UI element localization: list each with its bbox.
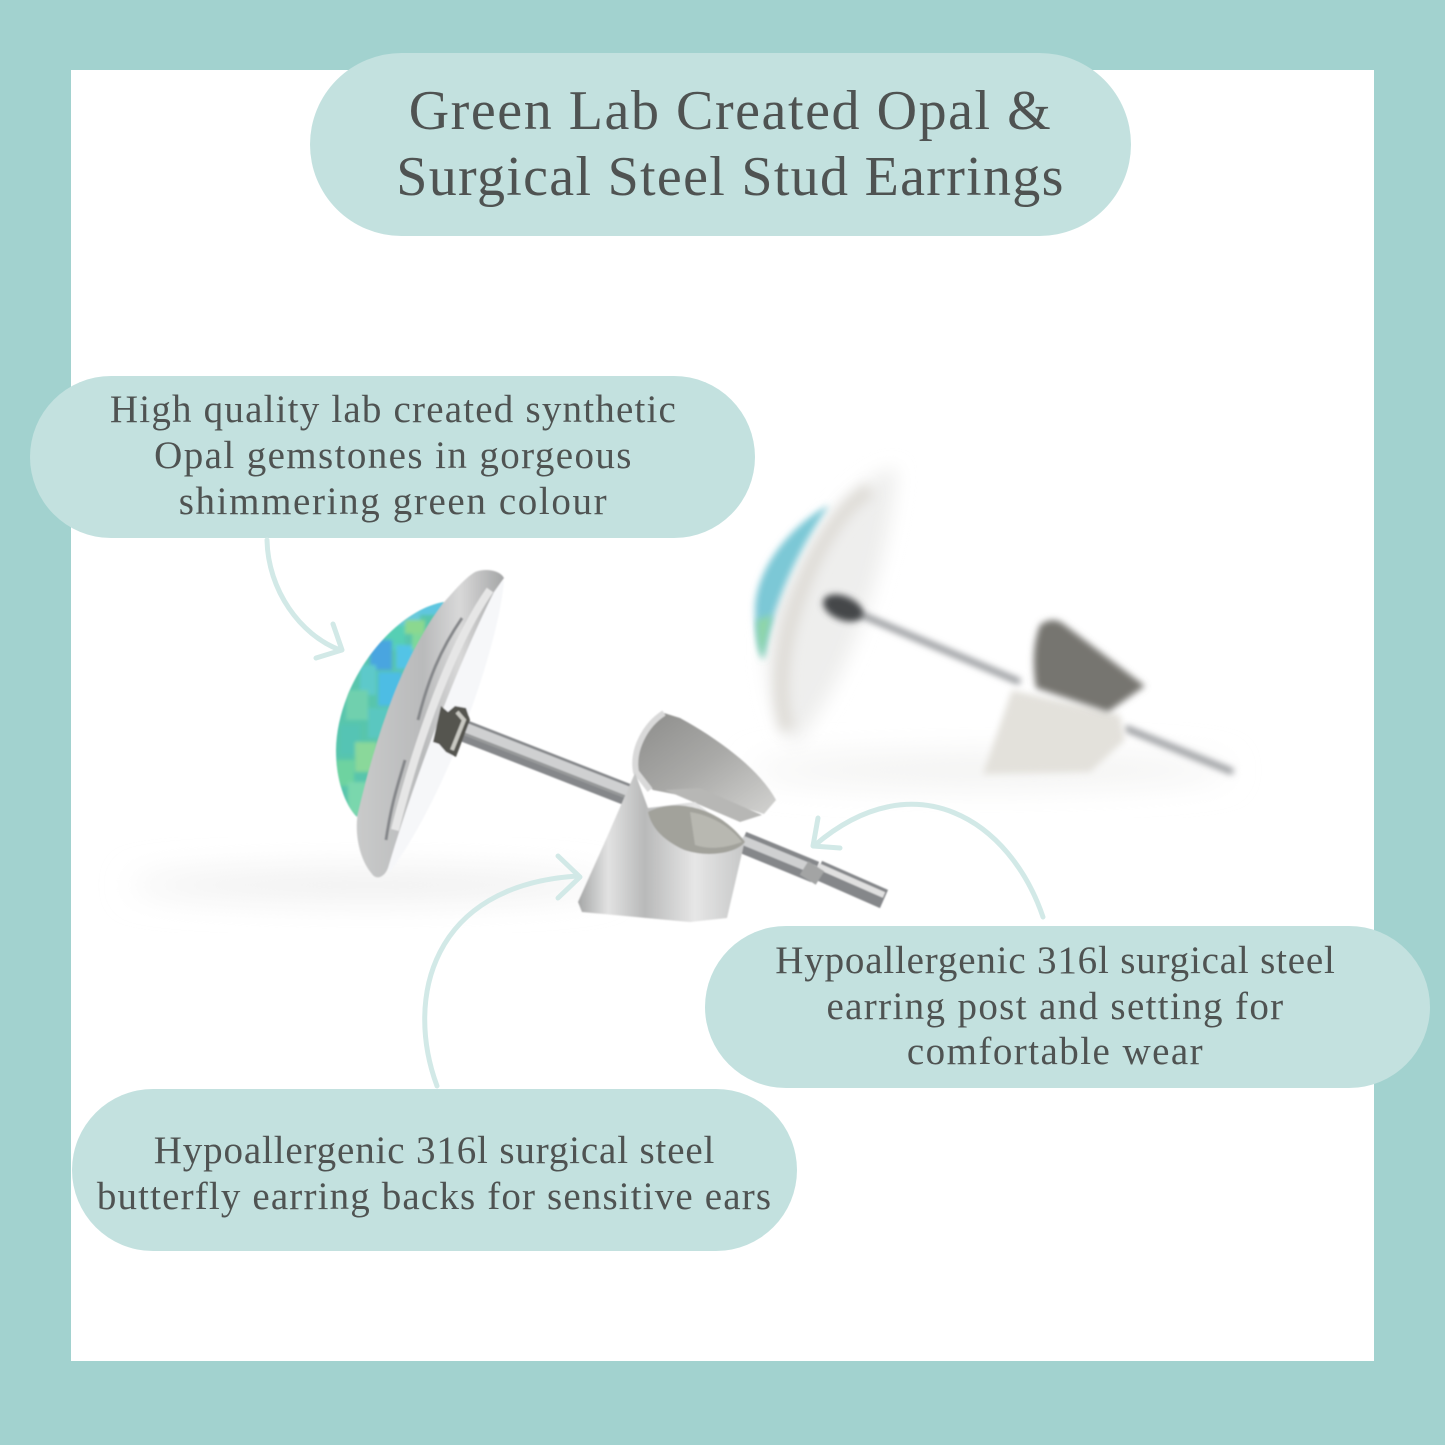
front post: [433, 706, 884, 899]
rear earring, blurred: [750, 468, 1233, 786]
callout text: [110, 388, 677, 523]
callout text: comfortable wear: [907, 1030, 1204, 1073]
butterfly hole shadow: [690, 812, 742, 848]
title pill: [310, 53, 1131, 236]
collar: [433, 706, 470, 757]
butterfly lower hole: [648, 806, 745, 854]
butterfly upper wing: [634, 713, 776, 814]
rear opal: [755, 505, 829, 660]
opal gemstone: [335, 601, 444, 818]
steel bezel: [357, 570, 504, 877]
butterfly inner bar: [665, 788, 762, 822]
title line 1: Green Lab Created Opal &: [409, 80, 1052, 142]
arrow to post: [813, 804, 1043, 917]
callout text: shimmering green colour: [179, 480, 608, 523]
post tip: [818, 870, 884, 899]
callout text: Hypoallergenic 316l surgical steel: [775, 939, 1336, 982]
arrow to butterfly back: [425, 856, 580, 1086]
post shaft front: [462, 730, 636, 798]
callout text: Opal gemstones in gorgeous: [154, 434, 633, 477]
title line 2: Surgical Steel Stud Earrings: [396, 146, 1065, 208]
collar highlight: [452, 712, 464, 750]
rear disc: [766, 468, 897, 745]
callout: earring post: [705, 926, 1430, 1088]
callout text: Hypoallergenic 316l surgical steel: [154, 1129, 715, 1172]
rear collar: [819, 589, 867, 627]
callout text: [96, 1129, 772, 1218]
bezel shading: [395, 590, 490, 830]
arrow to opal: [267, 540, 342, 658]
product photo: earrings: [80, 58, 1238, 1084]
callout text: High quality lab created synthetic: [110, 388, 677, 431]
rear opal green tip: [757, 615, 772, 660]
callout text: earring post and setting for: [826, 984, 1285, 1028]
front earring: [330, 570, 884, 922]
notch: [804, 868, 820, 878]
butterfly upper wing rim: [635, 713, 664, 790]
rear butterfly lower: [983, 690, 1125, 774]
callout: butterfly backs: [72, 1089, 797, 1251]
bezel dark line: [386, 618, 462, 840]
callout text: butterfly earring backs for sensitive ears: [97, 1175, 772, 1218]
rear post: [850, 610, 1233, 772]
shadow under front earring: [130, 869, 610, 901]
rear shadow: [750, 754, 1230, 786]
disc back: [386, 580, 504, 872]
callout: opal gemstones: [30, 376, 755, 538]
callout text: [775, 939, 1336, 1073]
post shaft rear: [742, 842, 815, 872]
butterfly lower wing: [578, 773, 745, 922]
rear bezel: [781, 490, 870, 730]
rear butterfly upper: [1034, 620, 1145, 712]
